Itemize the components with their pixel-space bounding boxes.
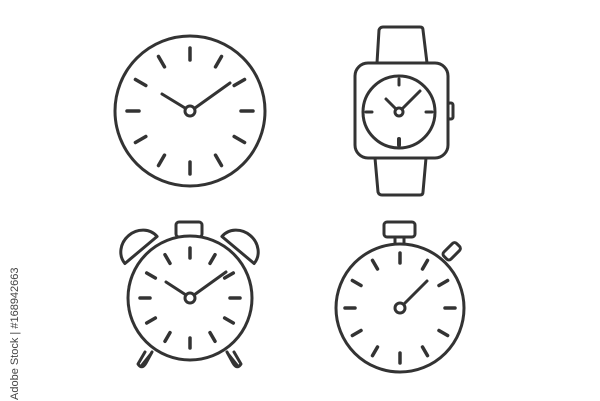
icon: alarm clock [113, 222, 266, 367]
icon: stopwatch [336, 222, 464, 372]
icon: smartwatch [355, 27, 453, 195]
icon: wall clock [115, 36, 265, 186]
watermark caption: Adobe Stock | #168942663 [9, 267, 21, 400]
